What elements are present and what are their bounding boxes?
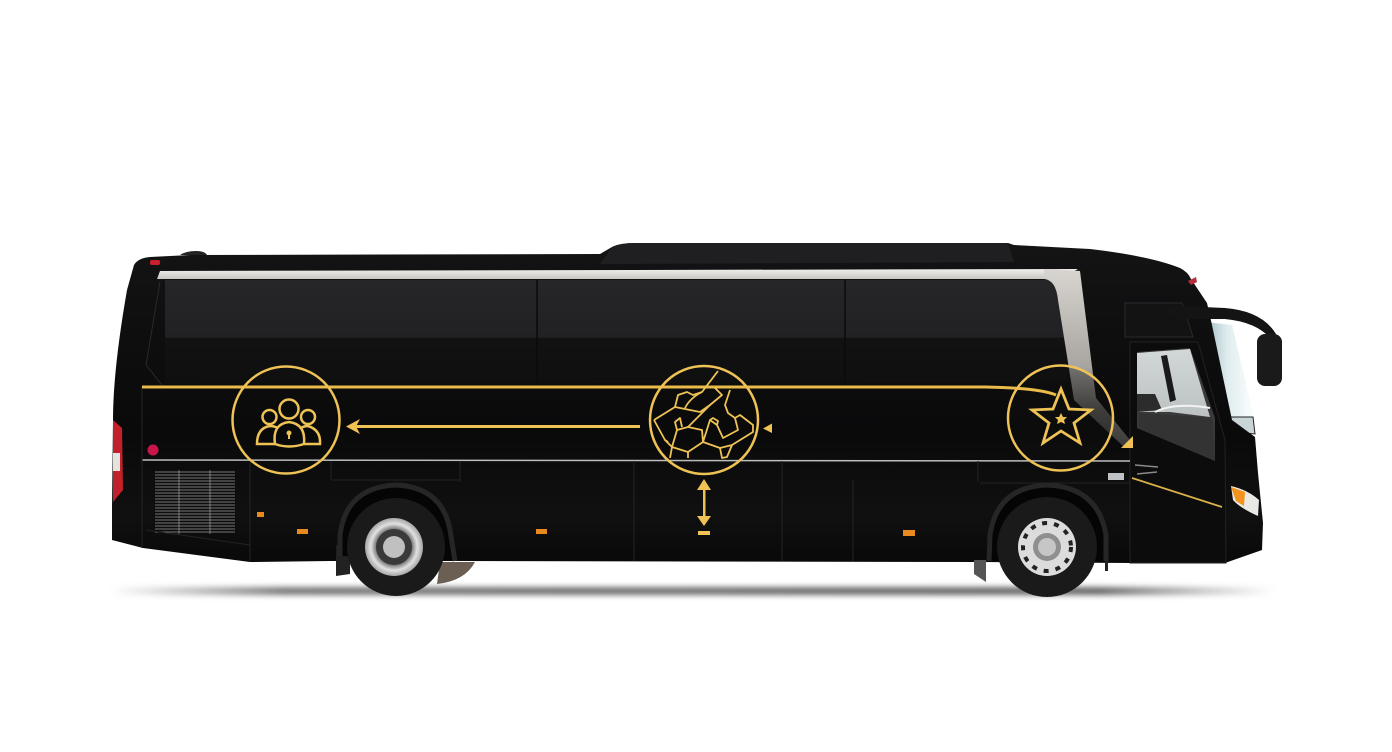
- marker: small left triangle: [763, 424, 772, 433]
- rear mudflap: [336, 545, 350, 576]
- door window light area: [1137, 349, 1210, 417]
- front wheel arch: [989, 485, 1106, 561]
- headlight amber: [1231, 487, 1245, 506]
- rear grille: [154, 470, 236, 535]
- amber markers: [257, 512, 915, 536]
- mirror arm: [1167, 306, 1276, 338]
- raised roof pod: [600, 243, 1014, 264]
- windshield: [1205, 322, 1254, 417]
- rear wheel: [347, 498, 475, 596]
- cab panel: [1125, 303, 1193, 337]
- badge: [1108, 473, 1124, 480]
- window dividers: [537, 280, 845, 386]
- ground shadow: [110, 587, 1275, 595]
- silver roof strip: [157, 269, 1078, 279]
- door: [1130, 342, 1226, 563]
- headlight: [1231, 486, 1259, 516]
- front wheel: [997, 497, 1097, 597]
- marker: short dash: [698, 531, 710, 535]
- front arch flap: [1105, 561, 1108, 571]
- lower windshield panel: [1229, 417, 1255, 434]
- rear panel crease: [146, 282, 162, 385]
- icon: star in circle: [1008, 366, 1113, 470]
- silver waist line: [142, 460, 1130, 461]
- arrow: left to people icon: [346, 419, 640, 434]
- panel lines: [142, 387, 1130, 561]
- rear tail light: [113, 420, 123, 502]
- gold door line: [1132, 478, 1222, 507]
- red top marker: [1188, 277, 1197, 285]
- rear top marker: [150, 260, 160, 265]
- front mudflap: [974, 560, 986, 582]
- door window: [1137, 348, 1215, 461]
- door window lower reflection: [1139, 413, 1215, 461]
- gold stripe: [142, 387, 1056, 395]
- silver pillar and fade to arrow: [1044, 269, 1130, 447]
- seat silhouette: [1137, 394, 1162, 412]
- window pillar: [1161, 355, 1176, 402]
- icon: people group in circle: [232, 366, 340, 474]
- disc behind star: [1010, 367, 1112, 469]
- mirror: [1257, 334, 1282, 386]
- red side marker: [148, 444, 158, 456]
- arrow: vertical double: [697, 479, 711, 526]
- tail light lens: [113, 453, 120, 471]
- icon: map in circle: [650, 366, 758, 474]
- side windows: [165, 280, 1076, 384]
- bus body: [112, 243, 1263, 563]
- door handle: [1135, 465, 1158, 474]
- arrow: gold corner pointer: [1121, 436, 1133, 448]
- rear wheel arch: [340, 485, 455, 561]
- dashboard line: [1155, 406, 1210, 412]
- bus: [112, 243, 1282, 582]
- roof hatch: [180, 251, 207, 255]
